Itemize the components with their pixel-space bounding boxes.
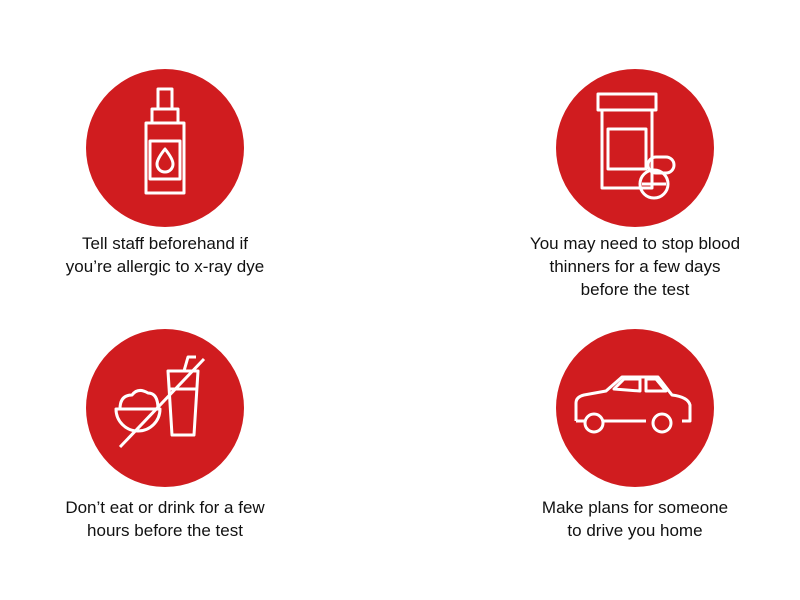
text: driver: to drive you home: [567, 521, 703, 540]
icon: car: [556, 329, 714, 487]
text: allergy: you’re allergic to x-ray dye: [66, 257, 264, 276]
panel: driver: [542, 329, 728, 540]
text: allergy: Tell staff beforehand if: [82, 234, 248, 253]
text: fasting: Don’t eat or drink for a few: [65, 498, 265, 517]
text: driver: [542, 498, 728, 540]
text: blood thinners: before the test: [581, 280, 689, 299]
text: fasting: [65, 498, 265, 540]
icon: dropper bottle: [86, 69, 244, 227]
text: blood thinners: You may need to stop blood: [530, 234, 740, 253]
panel: allergy: [66, 69, 264, 276]
icon: no food or drink: [86, 329, 244, 487]
panel: blood thinners: [530, 69, 740, 299]
icon: pill bottle: [556, 69, 714, 227]
text: allergy: [66, 234, 264, 276]
text: fasting: hours before the test: [87, 521, 243, 540]
text: blood thinners: [530, 234, 740, 299]
text: driver: Make plans for someone: [542, 498, 728, 517]
text: blood thinners: thinners for a few days: [549, 257, 721, 276]
panel: fasting: [65, 329, 265, 540]
